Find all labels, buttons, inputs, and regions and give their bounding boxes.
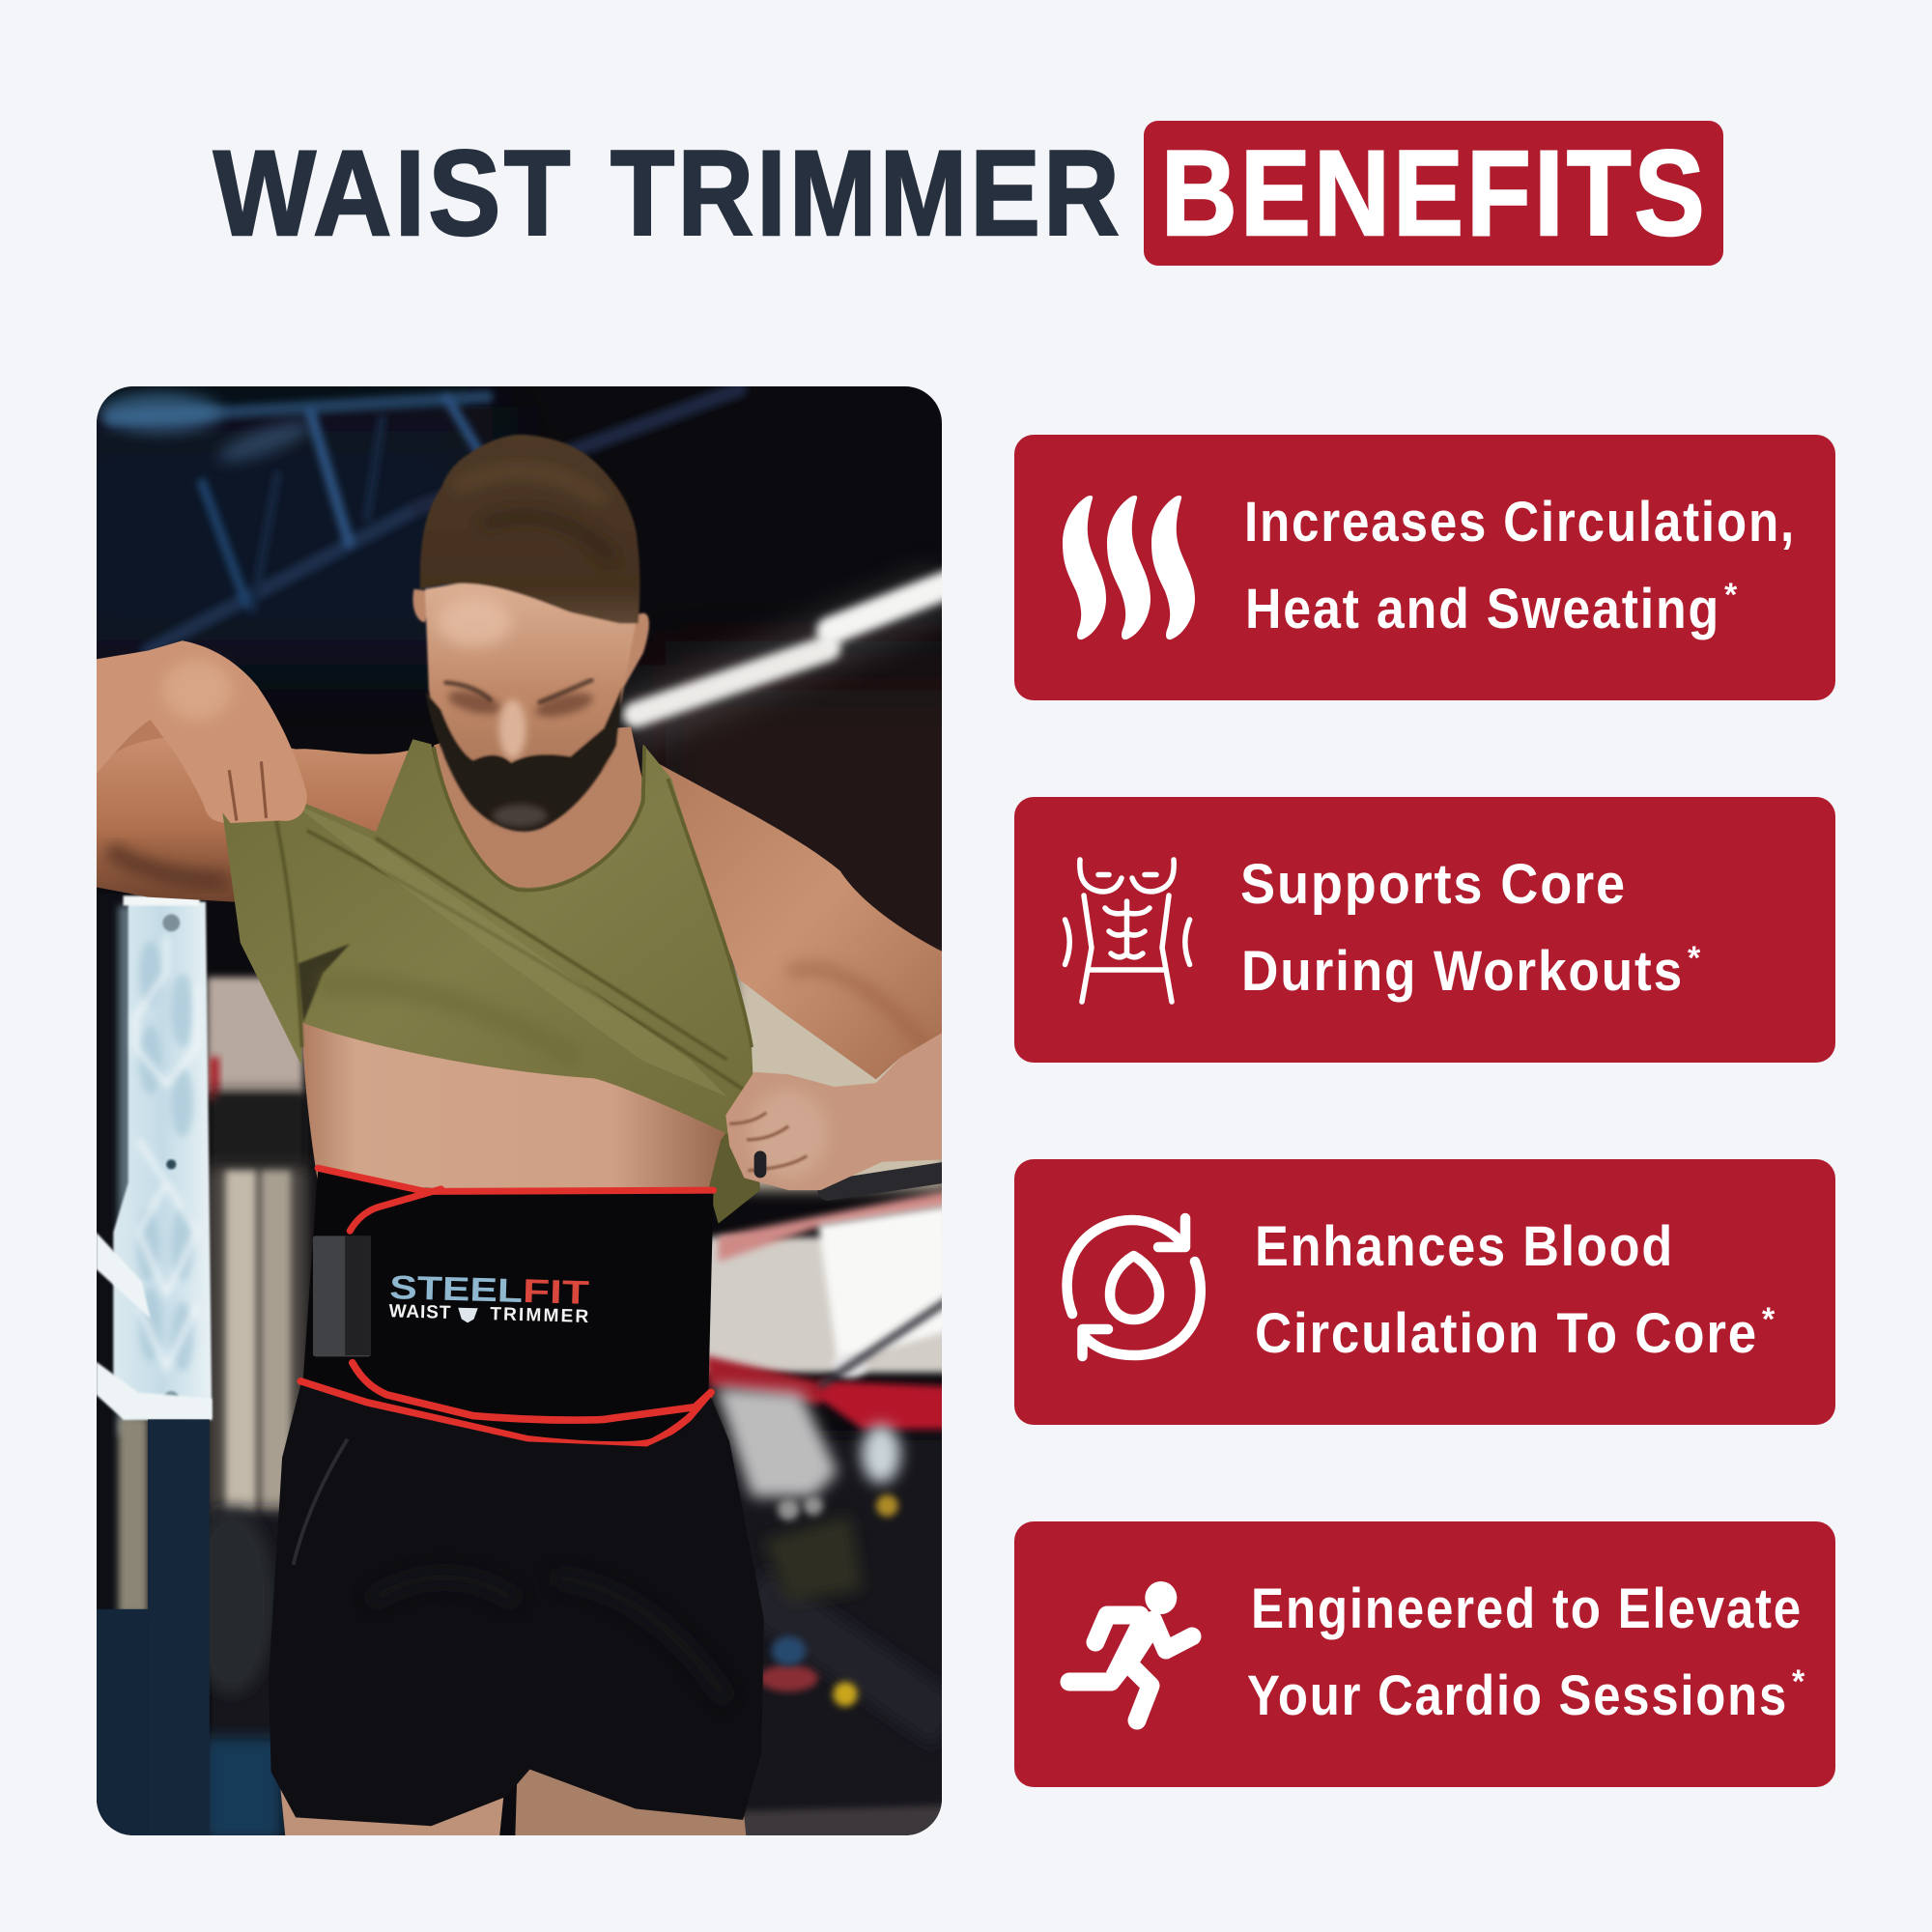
card 4 text bbox=[1247, 1577, 1805, 1727]
logo: WAIST bbox=[388, 1301, 451, 1323]
card 3 text: * bbox=[1762, 1301, 1776, 1338]
hair streaks bbox=[458, 470, 610, 554]
waist trimmer belt bbox=[300, 1168, 714, 1445]
man: left arm raised bbox=[96, 640, 414, 902]
man: right forearm and hand gripping shirt bbox=[725, 1029, 949, 1190]
card 4: cardio bbox=[1014, 1521, 1835, 1787]
icon: blood drop with circular arrows bbox=[1067, 1218, 1201, 1356]
card 1 text: Heat and Sweating bbox=[1245, 578, 1720, 640]
finger creases bbox=[229, 761, 267, 820]
belt body bbox=[303, 1171, 713, 1393]
card 4 text: Your Cardio Sessions bbox=[1247, 1664, 1788, 1727]
card 4 text: * bbox=[1792, 1663, 1805, 1700]
man: right upper arm bbox=[659, 764, 949, 1079]
card 1 text bbox=[1244, 491, 1796, 640]
tank top bbox=[222, 739, 754, 1140]
man: head bbox=[412, 435, 649, 832]
man: abdomen bbox=[301, 1023, 726, 1188]
belt red piping bbox=[300, 1168, 714, 1445]
panel: photo of man wearing waist trimmer bbox=[97, 386, 942, 1835]
forehead highlight bbox=[438, 598, 511, 647]
card 3 text: Enhances Blood bbox=[1255, 1215, 1674, 1278]
tank top folds bbox=[273, 807, 743, 1090]
velcro patch bbox=[313, 1236, 371, 1356]
man: legs bbox=[280, 1770, 746, 1835]
brows bbox=[446, 680, 591, 702]
card 2 text bbox=[1240, 853, 1701, 1003]
card 3: blood circulation bbox=[1014, 1159, 1835, 1425]
icon: running person bbox=[1069, 1581, 1192, 1720]
card 4 text: Engineered to Elevate bbox=[1251, 1577, 1803, 1640]
heading badge: benefits: BENEFITS bbox=[1161, 127, 1708, 261]
gray chin bbox=[493, 805, 547, 827]
wedding ring bbox=[754, 1151, 766, 1178]
icon: heat waves bbox=[1063, 496, 1195, 639]
photo background: gym bbox=[97, 386, 942, 1835]
beard bbox=[425, 686, 622, 832]
face bbox=[425, 579, 636, 826]
ears bbox=[412, 589, 649, 690]
black shorts bbox=[269, 1385, 764, 1826]
card 1 text: * bbox=[1724, 577, 1738, 613]
logo: FIT bbox=[523, 1273, 589, 1312]
logo: STEEL bbox=[389, 1269, 524, 1310]
card 1 text: Increases Circulation, bbox=[1244, 491, 1796, 554]
man: neck bbox=[434, 727, 647, 888]
card 2 text: During Workouts bbox=[1241, 940, 1684, 1003]
tank top tail bbox=[709, 1133, 760, 1223]
card 2 text: * bbox=[1688, 940, 1701, 977]
bench handle bbox=[828, 1172, 949, 1190]
card 1: circulation bbox=[1014, 435, 1835, 700]
logo bbox=[388, 1275, 589, 1323]
heading: trimmer: TRIMMER bbox=[611, 127, 1122, 261]
logo: TRIMMER bbox=[490, 1304, 589, 1327]
icon: abdominal muscles bbox=[1065, 860, 1190, 1002]
hair bbox=[420, 435, 639, 623]
title bbox=[213, 121, 1723, 266]
heading: waist: WAIST bbox=[213, 127, 574, 261]
nose bbox=[499, 699, 526, 759]
card 2 text: Supports Core bbox=[1240, 853, 1627, 916]
card 3 text bbox=[1255, 1215, 1776, 1365]
fingers pinching shirt bbox=[222, 794, 306, 823]
card 2: core support bbox=[1014, 797, 1835, 1063]
eye sockets bbox=[445, 686, 595, 722]
card 3 text: Circulation To Core bbox=[1255, 1302, 1758, 1365]
